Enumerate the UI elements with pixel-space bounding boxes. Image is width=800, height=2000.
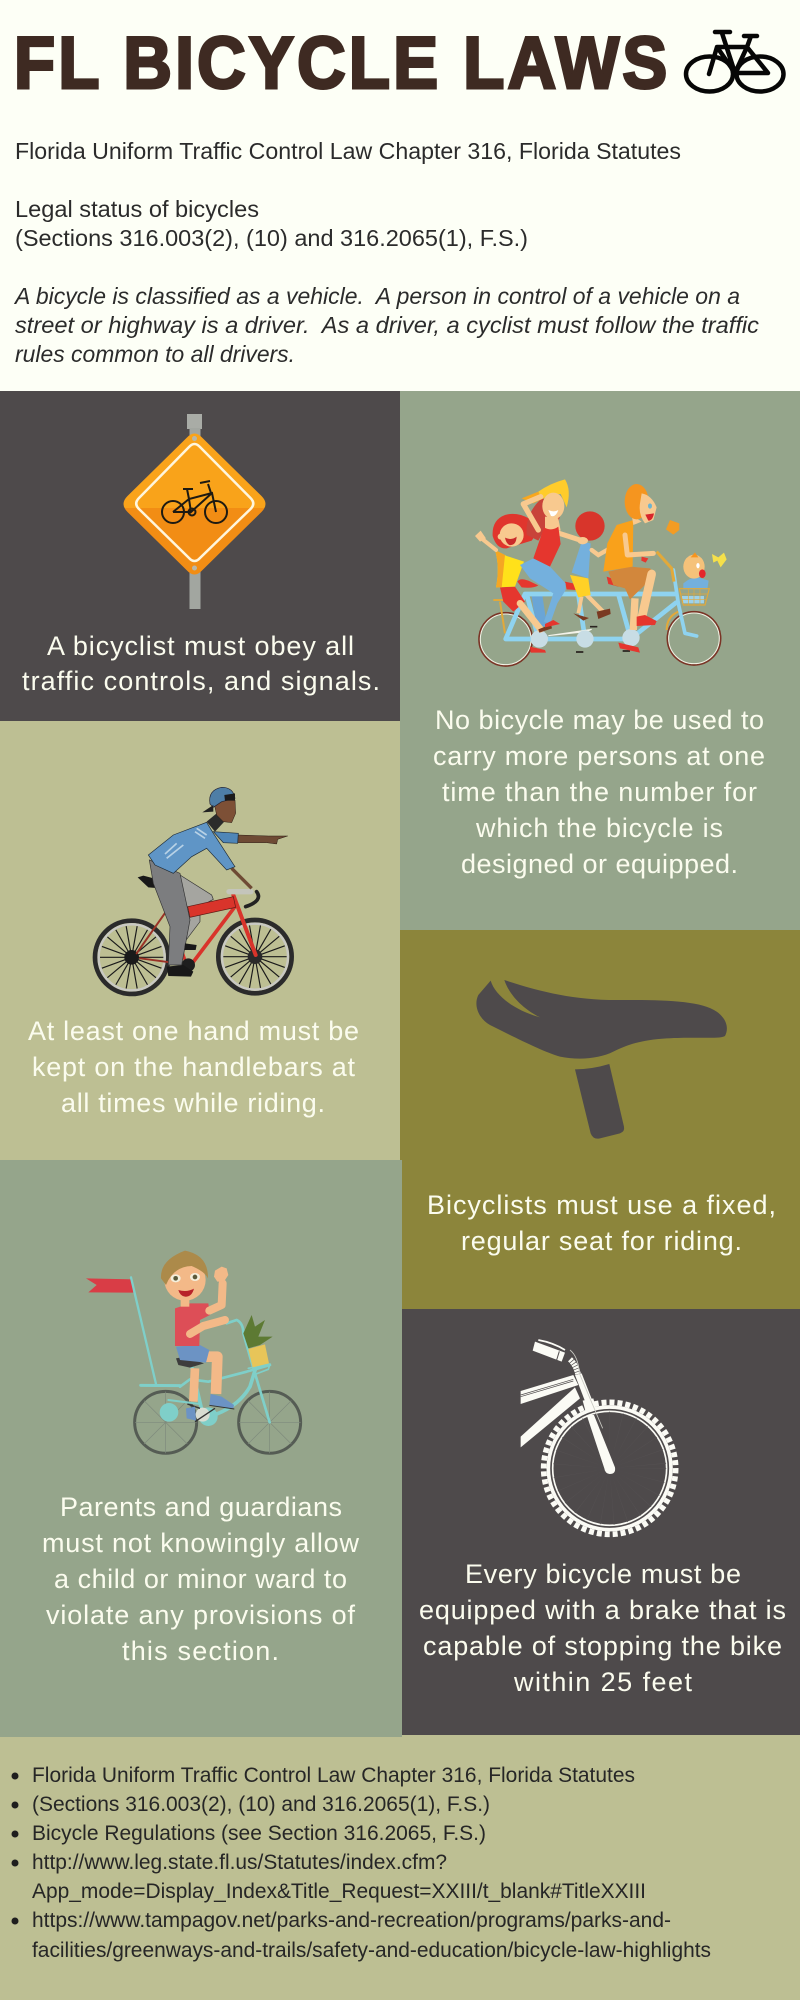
- list text: facilities/greenways-and-trails/safety-and-education/bicycle-law-highlights: [32, 1939, 711, 1962]
- list text: [32, 1764, 711, 1962]
- caption: Parents and guardians: [60, 1492, 342, 1522]
- icon: bicycle saddle: [476, 980, 727, 1139]
- illustration: child on bicycle with flag: [86, 1251, 301, 1453]
- panel: number of riders: [400, 391, 800, 930]
- saddles: [517, 577, 628, 590]
- caption: a child or minor ward to: [54, 1564, 347, 1594]
- intro text: [13, 138, 760, 367]
- panel: brake requirement: [402, 1309, 800, 1735]
- front leg: [149, 860, 190, 965]
- illustration: family on tandem bicycle: [475, 479, 727, 666]
- intro text: A bicycle is classified as a vehicle. A person in control of a vehicle on a: [13, 283, 740, 309]
- panel: fixed seat: [400, 930, 800, 1309]
- seat: [176, 1357, 204, 1368]
- caption: [433, 705, 765, 879]
- caption: equipped with a brake that is: [419, 1595, 786, 1625]
- intro text: street or highway is a driver. As a driver, a cyclist must follow the traffic: [15, 312, 760, 338]
- butterflies: [666, 520, 679, 535]
- mom: [520, 479, 585, 627]
- caption: capable of stopping the bike: [423, 1631, 782, 1661]
- intro text: Florida Uniform Traffic Control Law Chapter 316, Florida Statutes: [15, 138, 681, 164]
- head: [181, 1297, 189, 1307]
- caption: within 25 feet: [513, 1667, 692, 1697]
- panel: parents and guardians: [0, 1160, 402, 1737]
- list bullets: [12, 1772, 18, 1924]
- intro text: rules common to all drivers.: [15, 341, 295, 367]
- list text: Florida Uniform Traffic Control Law Chapter 316, Florida Statutes: [32, 1764, 635, 1787]
- caption: kept on the handlebars at: [32, 1052, 355, 1082]
- caption: carry more persons at one: [433, 741, 765, 771]
- boy in middle: [570, 511, 612, 621]
- caption: [42, 1492, 360, 1666]
- caption: which the bicycle is: [475, 813, 723, 843]
- caption: [28, 1016, 359, 1118]
- illustration: front wheel and handlebar: [521, 1340, 676, 1534]
- list text: App_mode=Display_Index&Title_Request=XXIII/t_blank#TitleXXIII: [32, 1880, 646, 1903]
- kid in back: [475, 514, 552, 633]
- caption: Bicyclists must use a fixed,: [427, 1190, 776, 1220]
- baby and basket: [679, 552, 709, 605]
- panel: sources list: [0, 1735, 800, 2000]
- list text: (Sections 316.003(2), (10) and 316.2065(1), F.S.): [32, 1793, 490, 1816]
- title: FL BICYCLE LAWS: [14, 22, 667, 104]
- caption: A bicyclist must obey all: [47, 631, 354, 661]
- caption: [22, 631, 380, 696]
- caption: designed or equipped.: [461, 849, 738, 879]
- intro text: Legal status of bicycles: [15, 196, 259, 222]
- list text: http://www.leg.state.fl.us/Statutes/index.cfm?: [32, 1851, 447, 1874]
- header: [13, 22, 784, 367]
- list text: Bicycle Regulations (see Section 316.2065, F.S.): [32, 1822, 486, 1845]
- torso and arms: [175, 1303, 210, 1346]
- shirt: [148, 822, 235, 873]
- intro text: (Sections 316.003(2), (10) and 316.2065(1), F.S.): [15, 225, 528, 251]
- mom back leg: [537, 593, 542, 627]
- list text: https://www.tampagov.net/parks-and-recreation/programs/parks-and-: [32, 1909, 671, 1932]
- caption: regular seat for riding.: [461, 1226, 742, 1256]
- caption: this section.: [122, 1636, 279, 1666]
- panel: hands on handlebars: [0, 721, 400, 1160]
- arm on handlebar: [232, 868, 252, 888]
- caption: [419, 1559, 786, 1697]
- icon: bicycle warning sign: [124, 414, 266, 609]
- front leg: [205, 1357, 217, 1394]
- icon: bicycle: [686, 32, 784, 92]
- plant and pot: [243, 1315, 273, 1348]
- caption: violate any provisions of: [46, 1600, 355, 1630]
- back leg: [193, 1368, 195, 1402]
- caption: No bicycle may be used to: [435, 705, 764, 735]
- dad: [603, 484, 657, 653]
- caption: time than the number for: [442, 777, 757, 807]
- caption: all times while riding.: [61, 1088, 325, 1118]
- illustration: man riding red bicycle: [95, 787, 292, 994]
- caption: [427, 1190, 776, 1256]
- caption: must not knowingly allow: [42, 1528, 360, 1558]
- caption: At least one hand must be: [28, 1016, 359, 1046]
- caption: Every bicycle must be: [465, 1559, 741, 1589]
- frame: [506, 570, 697, 639]
- panel: obey traffic controls: [0, 391, 400, 721]
- head: [207, 813, 224, 832]
- caption: traffic controls, and signals.: [22, 666, 380, 696]
